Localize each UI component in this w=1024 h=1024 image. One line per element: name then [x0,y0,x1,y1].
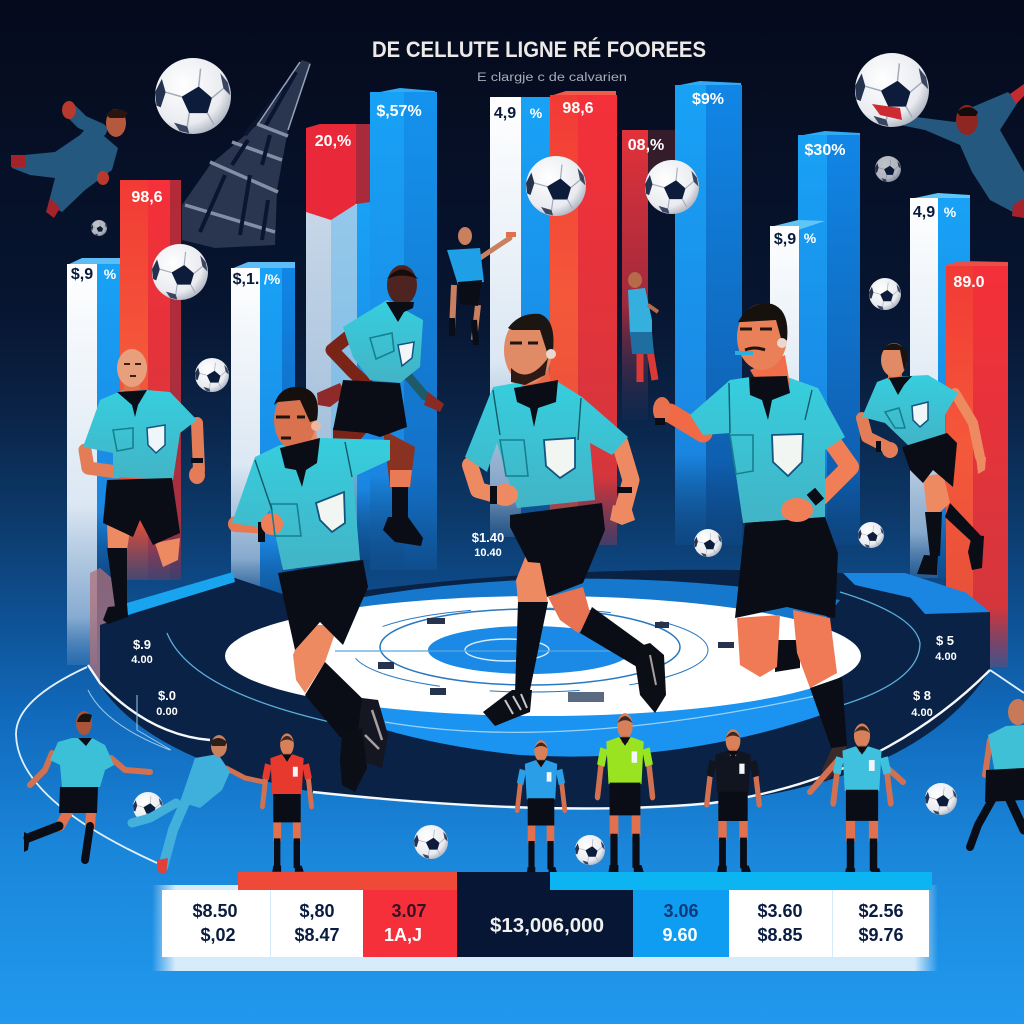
bar 6: white and blue [490,97,551,537]
label right lower: $ 8 [913,688,931,703]
floating balls [91,53,957,865]
ball lower centre [414,825,448,859]
flying player top right [900,84,1024,218]
bar 10: blue back: $30% [805,142,845,159]
cell 3: 3.07 [391,901,427,921]
official running blue [132,735,264,874]
ball lower middle [575,835,605,865]
small ball right [875,156,901,182]
cell 2 [271,890,363,957]
bottom data table [152,872,938,971]
cell 5 [633,890,729,957]
official cropped right [970,699,1024,847]
bar 12: red: 89.0 [953,274,985,291]
bar 5: tall blue: $,57% [376,103,422,120]
label left lower [156,688,178,718]
label right lower [911,688,933,719]
bar 3: white and blue [231,262,295,608]
bar 7: red: 98,6 [562,100,594,117]
cell 7 [833,890,929,957]
cell 7: $2.56 [858,901,904,921]
title: DE CELLUTE LIGNE RÉ FOOREES [372,37,706,62]
cell 6: $8.85 [757,925,803,945]
bar 8: fading red: 08,% [628,137,664,154]
bar 10b: white front [770,220,825,546]
bar 11: white and blue: % [944,204,957,220]
outer orbit ring [16,667,1024,863]
red glove on top right ball [872,104,902,120]
tab strip red [238,872,457,890]
ball near blue bar [645,160,699,214]
cell 6: $3.60 [757,901,803,921]
bar 1: white and blue: % [104,266,117,282]
label centre [472,530,504,559]
referee back centre [317,265,444,546]
cell 7: $9.76 [858,925,904,945]
ball lower left [133,792,163,822]
table glow band [152,885,938,971]
ball right low [858,522,884,548]
flying player top left [11,101,128,218]
bar 6: white and blue: % [530,105,543,121]
side platform left top [127,572,235,615]
cell 3 [363,890,457,957]
official running left [24,711,150,860]
pale block behind left platform [90,568,120,690]
main referee centre [465,314,666,726]
main referee right [653,303,850,782]
small ball left [91,220,107,236]
bar 9: tall blue: $9% [692,91,724,108]
cell 6 [729,890,832,957]
official in black [707,729,759,872]
label centre: 10.40 [474,547,502,559]
bar 3: white and blue: /% [264,271,281,287]
label right upper: $ 5 [936,633,954,648]
bar 4: red over pale blue: 20,% [315,133,351,150]
subtitle: E clargje c de calvarien [477,72,627,84]
cell centre total [457,890,633,957]
label centre: $1.40 [472,530,504,545]
ball between bars right [869,278,901,310]
main referee left [232,387,390,792]
ball top right [855,53,929,127]
tab strip dark [457,872,550,890]
cell 2: $8.47 [294,925,340,945]
ball by left referee [195,358,229,392]
far player in blue [628,272,658,382]
bar 1: white and blue [67,258,121,665]
bar chart [67,81,1008,667]
tab strip blue [550,872,932,890]
central circular platform [88,570,990,808]
bar 12: red [946,261,1008,667]
small value labels [131,530,957,719]
bar 9: tall blue [675,81,742,545]
cell 3: 1A,J [384,925,422,945]
bar 1: white and blue: $,9 [71,266,93,283]
referee right [862,343,986,575]
bar 7: red [550,91,617,545]
label left upper [131,637,153,666]
official in blue [517,740,565,873]
bar 2: red [120,180,181,580]
bar 10: blue back [798,131,860,545]
ball large top left [155,58,231,134]
label left lower: 0.00 [156,706,178,718]
official teal arms out [810,724,903,875]
official in red [262,733,312,872]
ball left bars [152,244,208,300]
side platform right top [843,573,990,614]
cell 2: $,80 [299,901,335,921]
bar 8: fading red [622,130,675,420]
label right lower: 4.00 [911,707,933,719]
cell 5: 9.60 [662,925,698,945]
bar 6: white and blue: 4,9 [494,105,516,122]
bar 11: white and blue: 4,9 [913,204,935,221]
icon: Eiffel tower [182,60,311,248]
far referee with flag [447,227,516,345]
ball centre right [694,529,722,557]
label right upper: 4.00 [935,651,957,663]
bar 10b: white front: % [804,230,817,246]
bar 11: white and blue [910,193,970,578]
bar 5: tall blue [370,88,437,570]
bar 2: red: 98,6 [131,189,163,206]
ball over red bar [526,156,586,216]
cell centre total: $13,006,000 [490,914,604,937]
cell 1: $8.50 [192,901,238,921]
label right upper [935,633,957,663]
lower row of officials [24,699,1024,875]
official in lime [598,713,652,872]
ball lower right [925,783,957,815]
label left upper: $.9 [133,637,151,652]
cell 1: $,02 [200,925,236,945]
label left lower: $.0 [158,688,176,703]
cell 5: 3.06 [663,901,699,921]
cell 1 [162,890,270,957]
bar 10b: white front: $,9 [774,231,796,248]
bar 4: red over pale blue [306,124,370,560]
label left upper: 4.00 [131,654,153,666]
bar 3: white and blue: $,1. [233,271,259,288]
referee left [83,349,205,624]
